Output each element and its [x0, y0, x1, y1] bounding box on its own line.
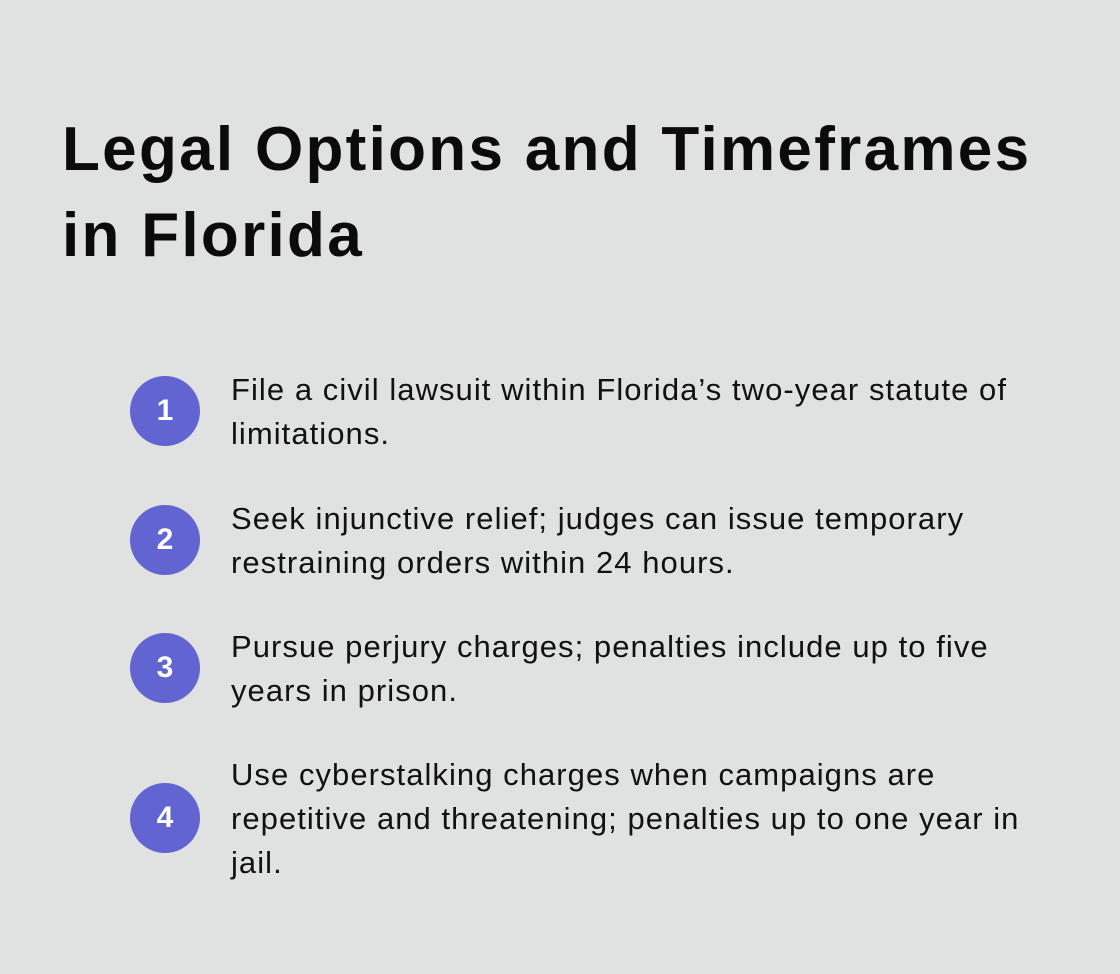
text 4 [230, 757, 1019, 880]
item 4 [130, 757, 1019, 880]
text 2: Seek injunctive relief; judges can issue temporary [231, 501, 964, 536]
icon: number 3 [130, 633, 200, 703]
text 4: Use cyberstalking charges when campaigns are [231, 757, 935, 792]
text 4: jail. [231, 845, 283, 880]
title: in Florida [62, 201, 364, 270]
text 3: Pursue perjury charges; penalties include up to five [231, 629, 989, 664]
text 1: limitations. [231, 416, 390, 451]
icon: number 4 [130, 783, 200, 853]
title [62, 115, 1031, 270]
icon: number 1 [130, 376, 200, 446]
item 1 [130, 372, 1007, 451]
text 3: years in prison. [231, 673, 458, 708]
icon: number 2 [130, 505, 200, 575]
icon: number 4: 4 [157, 801, 173, 834]
item 3 [130, 629, 989, 708]
item 2 [130, 501, 964, 580]
text 3 [231, 629, 989, 708]
icon: number 2: 2 [157, 523, 173, 556]
icon: number 3: 3 [157, 651, 173, 684]
text 1 [231, 372, 1007, 451]
text 2: restraining orders within 24 hours. [231, 545, 735, 580]
icon: number 1: 1 [157, 394, 173, 427]
text 2 [231, 501, 964, 580]
title: Legal Options and Timeframes [62, 115, 1031, 184]
text 1: File a civil lawsuit within Florida’s two-year statute of [231, 372, 1007, 407]
text 4: repetitive and threatening; penalties up to one year in [231, 801, 1019, 836]
